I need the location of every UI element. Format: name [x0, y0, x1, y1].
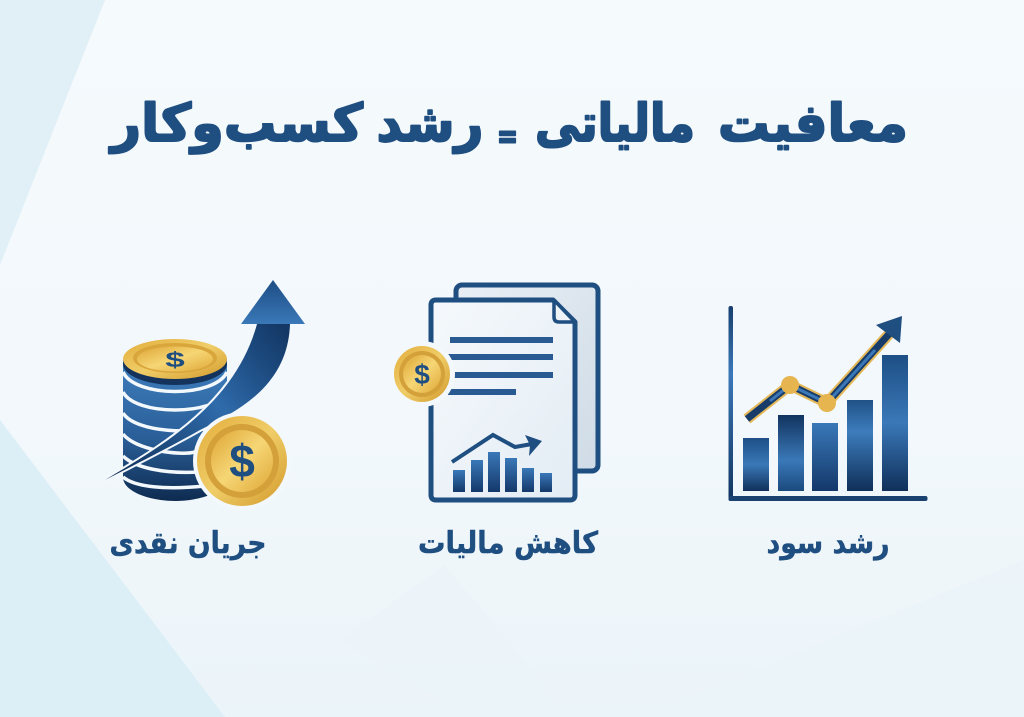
top coin: $	[165, 349, 185, 372]
front sheet	[431, 300, 575, 500]
document coin: $	[414, 359, 430, 390]
bars	[743, 355, 908, 491]
text lines	[448, 337, 553, 395]
mini trend arrow	[452, 435, 542, 462]
title: =	[497, 117, 518, 155]
caption: profit growth: رشد سود	[766, 526, 890, 561]
title: معافیت	[718, 94, 908, 154]
icon: profit chart	[728, 306, 928, 501]
sweeping arrow	[105, 280, 305, 480]
back sheet	[456, 285, 598, 471]
title: کسب‌وکار	[108, 94, 364, 154]
document coin	[389, 341, 455, 407]
folded corner	[554, 300, 575, 322]
icon: coin stack with rising arrow	[105, 280, 305, 510]
title: مالیاتی	[535, 94, 695, 154]
caption: tax reduction: کاهش مالیات	[418, 526, 599, 561]
large coin	[193, 412, 291, 510]
icon: tax documents	[389, 285, 598, 500]
title	[108, 94, 908, 155]
mini bar chart	[453, 452, 552, 492]
coin stack body	[123, 359, 227, 501]
axes	[728, 306, 928, 501]
title: رشد	[376, 94, 484, 154]
large coin: $	[229, 435, 255, 487]
trend line	[747, 316, 902, 419]
caption: cash flow: جریان نقدی	[110, 526, 266, 561]
top coin	[123, 339, 227, 385]
